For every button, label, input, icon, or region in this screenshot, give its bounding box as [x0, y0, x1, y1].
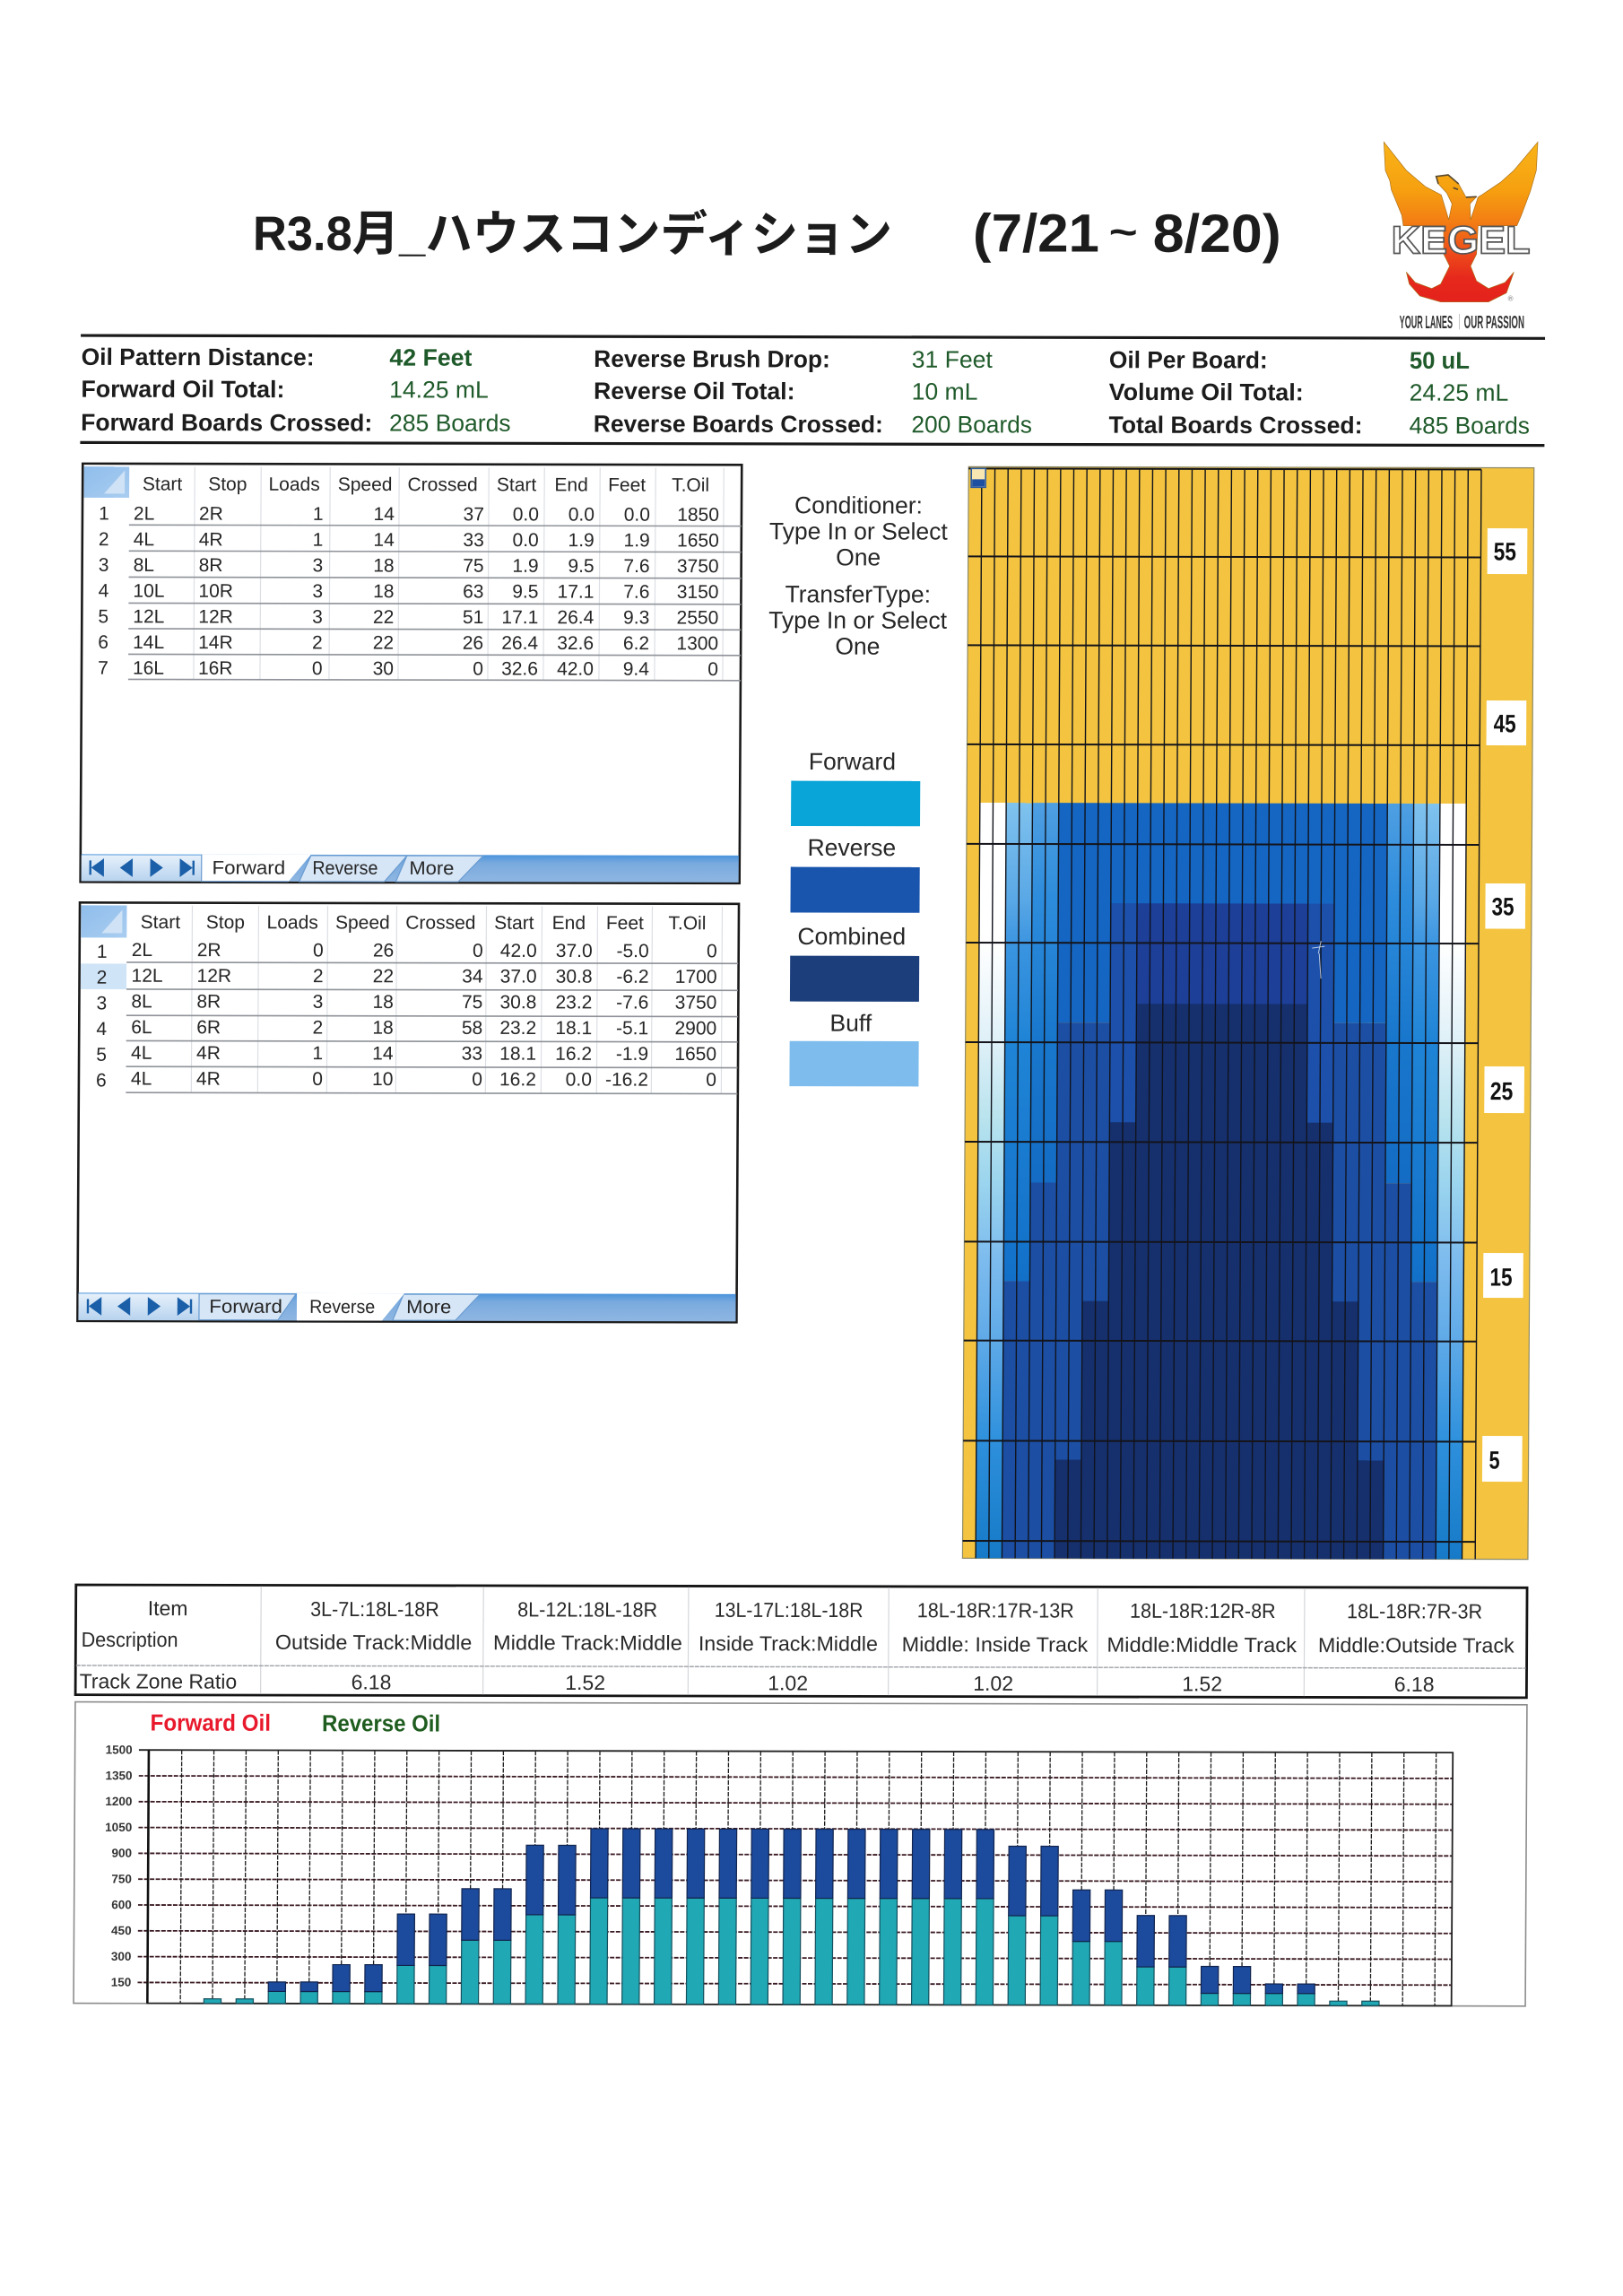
table data rows: 14 — [372, 1043, 394, 1064]
table data rows: 4 — [96, 1019, 107, 1039]
y axis labels: 150 — [111, 1976, 131, 1989]
table data rows: -5.0 — [616, 941, 649, 961]
y axis labels: 1500 — [106, 1743, 133, 1756]
y axis labels: 1200 — [105, 1795, 132, 1808]
table header row: End — [554, 474, 588, 495]
chart legend — [151, 1709, 440, 1736]
summary column: reverse — [594, 345, 1032, 438]
table corner cell — [84, 466, 129, 498]
y axis labels: 600 — [111, 1898, 132, 1911]
distance label 5: 5 — [1488, 1447, 1500, 1474]
table data rows: 3 — [312, 555, 323, 576]
panel: oil per board chart — [74, 1702, 1527, 2006]
ratio row: 6.18 — [1394, 1673, 1435, 1696]
description row: Inside Track:Middle — [699, 1631, 878, 1656]
table data rows: 14 — [374, 504, 395, 525]
table data rows: 2 — [97, 968, 107, 988]
distance grid lines — [963, 468, 1481, 1542]
table data rows: 16R — [198, 658, 233, 679]
distance label 15: 15 — [1489, 1264, 1513, 1292]
distance label 5 — [1482, 1436, 1523, 1482]
legend: combined: Combined — [797, 923, 906, 950]
table data rows — [98, 503, 719, 680]
table header row: Start — [497, 474, 537, 495]
conditioner and transfer type note: One — [836, 544, 881, 570]
table data rows: 33 — [462, 1044, 482, 1065]
summary column: totals — [1108, 346, 1531, 439]
table data rows: 30 — [373, 658, 394, 679]
table data rows: 0.0 — [513, 530, 539, 551]
sheet tab bar: Forward active: Forward — [212, 857, 285, 879]
table data rows: -16.2 — [605, 1070, 648, 1091]
tagline: YOUR LANES — [1400, 313, 1453, 333]
table data rows: 12R — [197, 966, 231, 987]
table header row: T.Oil — [672, 475, 709, 496]
table data rows: 0 — [473, 658, 483, 679]
table data rows: 4L — [134, 529, 154, 550]
table header row: Speed — [338, 474, 393, 495]
summary column: forward: Oil Pattern Distance: — [82, 344, 315, 370]
table data rows: 9.4 — [623, 659, 649, 680]
table data rows: 18.1 — [555, 1018, 592, 1039]
table data rows: 30.8 — [556, 967, 593, 987]
sheet tab bar: Reverse active: More — [406, 1297, 451, 1318]
distance label 45 — [1487, 700, 1526, 745]
table data rows: 18 — [372, 992, 394, 1013]
table data rows: 3 — [96, 993, 107, 1013]
distance label 25: 25 — [1490, 1077, 1513, 1105]
y axis labels: 1350 — [105, 1769, 133, 1782]
summary column: forward: 14.25 mL — [389, 376, 489, 404]
table data rows: 26 — [373, 941, 394, 961]
table data rows: 1 — [313, 530, 323, 551]
stacked bars: reverse oil — [268, 1828, 1315, 1994]
ratio row: 1.52 — [1182, 1672, 1222, 1695]
table data rows: 2 — [312, 632, 323, 653]
table header row: End — [552, 913, 586, 934]
table data rows: 2 — [313, 966, 324, 987]
table data rows: 5 — [96, 1045, 107, 1065]
distance label 35: 35 — [1491, 892, 1515, 920]
table header row — [143, 474, 709, 496]
ratio row: 1.52 — [565, 1671, 605, 1694]
ratio row: 1.02 — [973, 1672, 1013, 1695]
table data rows: 22 — [373, 966, 394, 987]
table header row: Crossed — [405, 913, 476, 934]
table header row: Stop — [206, 912, 245, 933]
track zone ratio table — [75, 1585, 1527, 1698]
table data rows: 30.8 — [499, 992, 536, 1013]
legend: buff — [789, 1010, 919, 1086]
table data rows: 2L — [134, 503, 154, 525]
zone ranges row — [148, 1596, 1482, 1623]
legend: combined — [790, 923, 919, 1002]
table header row — [141, 912, 706, 934]
title: ~ — [1109, 211, 1138, 255]
panel: reverse load table — [77, 902, 739, 1322]
board grid lines — [976, 468, 1481, 1559]
description row: Middle:Outside Track — [1318, 1633, 1515, 1657]
table data rows: 42.0 — [500, 941, 537, 961]
table data rows: 8L — [131, 991, 152, 1012]
summary column: reverse: 10 mL — [912, 378, 978, 405]
table header row: Crossed — [407, 474, 478, 495]
table data rows: 6R — [196, 1017, 221, 1038]
table data rows: 12L — [133, 606, 164, 627]
summary column: forward: Forward Oil Total: — [81, 376, 285, 403]
summary column: totals: Volume Oil Total: — [1109, 378, 1304, 405]
table data rows: 0 — [473, 941, 483, 961]
distance label 25 — [1484, 1066, 1524, 1113]
description row — [82, 1628, 1515, 1657]
table data rows: 18 — [372, 1018, 394, 1039]
title: 8/20) — [1153, 204, 1281, 264]
sheet tab bar: Forward active — [82, 854, 739, 883]
table header row: Speed — [335, 912, 390, 934]
table data rows: 32.6 — [557, 633, 594, 654]
table data rows: 4R — [196, 1043, 221, 1064]
table data rows: 4 — [99, 581, 109, 602]
phoenix — [1384, 142, 1538, 302]
table data rows: 7 — [98, 658, 108, 679]
y axis labels: 900 — [112, 1847, 132, 1860]
description row: Outside Track:Middle — [275, 1631, 472, 1654]
table data rows: 14R — [198, 632, 233, 653]
summary column: forward: 42 Feet — [389, 344, 473, 371]
table data rows: 2 — [312, 1017, 323, 1039]
table header row: Feet — [608, 475, 646, 496]
table data rows: 3750 — [675, 993, 716, 1013]
table data rows: 0.0 — [513, 504, 539, 525]
stacked bars: forward oil — [204, 1897, 1380, 2005]
distance label 35 — [1485, 883, 1525, 929]
table data rows: 26.4 — [501, 633, 539, 654]
registered mark: ® — [1508, 295, 1514, 303]
summary column: forward: 285 Boards — [389, 410, 511, 437]
table header row: Start — [143, 474, 183, 495]
colour legend — [789, 748, 920, 1086]
table data rows: 12R — [198, 606, 233, 628]
icon: Kegel phoenix logo: OUR PASSION — [1464, 313, 1524, 333]
y axis labels — [104, 1743, 133, 1989]
conditioner and transfer type note: Conditioner: — [794, 491, 923, 519]
table data rows: 9.3 — [623, 607, 649, 628]
oil columns — [976, 803, 1466, 1559]
conditioner and transfer type note: TransferType: — [785, 580, 931, 608]
summary column: totals: Total Boards Crossed: — [1108, 412, 1363, 439]
table data rows: 3 — [99, 555, 109, 576]
table data rows: 0 — [707, 941, 717, 961]
table data rows: 1650 — [674, 1044, 716, 1065]
zone ranges row: 18L-18R:17R-13R — [917, 1598, 1074, 1622]
table data rows: 1 — [312, 1043, 323, 1064]
summary column: reverse: 200 Boards — [911, 411, 1032, 438]
table data rows: 0 — [312, 1069, 323, 1090]
table data rows: 4R — [199, 529, 223, 550]
table data rows: 2R — [197, 940, 221, 961]
y axis labels: 300 — [111, 1950, 131, 1963]
table header row: Loads — [267, 912, 318, 933]
table data rows: 6.2 — [623, 633, 649, 654]
table data rows: 17.1 — [501, 607, 538, 628]
table data rows: 22 — [373, 633, 394, 654]
panel: forward load table — [81, 464, 742, 883]
scan scratch — [1312, 941, 1324, 978]
table data rows — [96, 940, 717, 1092]
title: (7/21 — [973, 203, 1099, 264]
description row: Description — [82, 1628, 178, 1651]
y axis labels: 450 — [111, 1924, 132, 1937]
table data rows: 6L — [131, 1017, 152, 1038]
table data rows: 1 — [313, 504, 324, 525]
zone ranges row: Item — [148, 1596, 188, 1620]
table data rows: 0 — [707, 659, 718, 680]
table data rows: 37.0 — [556, 941, 593, 961]
sheet tab bar: Forward active: More — [409, 858, 455, 879]
pattern summary block — [80, 335, 1545, 446]
table corner cell — [81, 905, 127, 937]
table data rows: 18.1 — [499, 1044, 536, 1065]
table data rows: 6 — [98, 632, 108, 653]
table data rows: 2550 — [677, 607, 718, 629]
table data rows: 37.0 — [500, 967, 537, 987]
table data rows: 8L — [134, 555, 154, 576]
summary column: reverse: Reverse Boards Crossed: — [594, 411, 883, 438]
distance label 55 — [1488, 528, 1527, 574]
table data rows: 1.9 — [568, 530, 595, 551]
table data rows: -6.2 — [616, 967, 649, 987]
table data rows: 10R — [198, 581, 233, 602]
table data rows: 23.2 — [499, 1018, 536, 1039]
description row: Middle: Inside Track — [902, 1632, 1089, 1657]
sheet tab bar: Reverse active: Forward — [209, 1297, 282, 1318]
zone ranges row: 3L-7L:18L-18R — [310, 1597, 439, 1621]
table data rows: 8R — [196, 992, 221, 1013]
table data rows: 1 — [97, 942, 108, 962]
table data rows: 14L — [133, 632, 164, 653]
chart legend: Forward Oil — [151, 1709, 271, 1736]
table header row: Loads — [268, 474, 320, 495]
chart legend: Reverse Oil — [322, 1709, 440, 1736]
table data rows: 0.0 — [568, 504, 595, 526]
title: R3.8月_ハウスコンディション — [253, 207, 892, 262]
table data rows: 3 — [313, 992, 323, 1013]
beak and eye detail — [1436, 175, 1477, 197]
table header row: Start — [494, 913, 534, 934]
y axis labels: 1050 — [105, 1821, 132, 1834]
table data rows: 8R — [199, 555, 223, 576]
table data rows: 0.0 — [624, 505, 650, 526]
distance label 55: 55 — [1494, 538, 1516, 566]
table data rows: 42.0 — [557, 659, 594, 680]
conditioner and transfer type note: One — [835, 633, 881, 660]
legend: reverse — [790, 834, 920, 913]
table data rows: 3 — [312, 581, 323, 602]
table data rows: 2900 — [674, 1018, 716, 1039]
table data rows: 0 — [472, 1069, 482, 1090]
table data rows: 1700 — [675, 967, 717, 987]
table data rows: 4L — [131, 1068, 152, 1090]
table data rows: 26.4 — [557, 607, 595, 628]
table header row: Feet — [606, 913, 644, 934]
table data rows: 4R — [196, 1069, 221, 1090]
table data rows: 3750 — [677, 556, 719, 577]
table data rows: 1850 — [677, 505, 719, 526]
table data rows: 1 — [99, 503, 109, 524]
table data rows: 33 — [463, 530, 484, 551]
table data rows: -7.6 — [616, 992, 648, 1013]
table data rows: 7.6 — [623, 582, 650, 603]
ratio row — [80, 1669, 1435, 1696]
table data rows: 0 — [313, 940, 324, 961]
table data rows: 0 — [312, 658, 323, 679]
legend: reverse: Reverse — [807, 834, 896, 861]
summary column: totals: Oil Per Board: — [1109, 346, 1268, 374]
summary column: reverse: 31 Feet — [912, 346, 994, 373]
sheet tab bar: Reverse active — [78, 1292, 736, 1321]
summary column: forward: Forward Boards Crossed: — [81, 409, 372, 437]
table data rows: 1.9 — [624, 530, 650, 551]
title — [253, 202, 1281, 264]
table data rows: 22 — [373, 607, 394, 628]
panel: lane oil pattern heat map — [962, 466, 1534, 1560]
table data rows: 18 — [373, 555, 395, 576]
table data rows: 10 — [372, 1069, 393, 1090]
table data rows: 0.0 — [566, 1069, 592, 1091]
legend: forward — [791, 748, 920, 826]
ratio row: 6.18 — [352, 1670, 392, 1694]
legend: forward: Forward — [809, 748, 896, 775]
table data rows: 58 — [462, 1018, 482, 1039]
icon: Kegel phoenix logo — [1384, 142, 1538, 333]
table data rows: 0 — [706, 1070, 716, 1091]
table data rows: 6 — [96, 1070, 107, 1091]
table data rows: 18 — [373, 581, 395, 602]
description row: Middle Track:Middle — [493, 1631, 682, 1655]
table data rows: 16.2 — [499, 1069, 536, 1090]
sheet tab bar: Reverse active: Reverse — [309, 1297, 375, 1318]
summary column: forward — [81, 344, 511, 437]
sheet tab bar: Forward active: Reverse — [312, 858, 378, 879]
table data rows: 16L — [133, 658, 164, 679]
table data rows: -1.9 — [616, 1044, 648, 1065]
table data rows: 9.5 — [512, 581, 539, 602]
table data rows: 23.2 — [555, 992, 592, 1013]
selected row header — [81, 963, 126, 989]
table data rows: 2L — [132, 940, 152, 961]
description row: Middle:Middle Track — [1107, 1633, 1298, 1657]
table data rows: 32.6 — [501, 659, 538, 680]
table header row: T.Oil — [668, 913, 706, 934]
summary column: reverse: Reverse Brush Drop: — [594, 345, 830, 373]
zone ranges row: 8L-12L:18L-18R — [517, 1597, 657, 1622]
table data rows: 9.5 — [568, 556, 595, 577]
conditioner and transfer type note — [768, 491, 949, 660]
table data rows: 34 — [462, 966, 483, 987]
table data rows: 75 — [462, 992, 482, 1013]
zone ranges row: 13L-17L:18L-18R — [715, 1598, 864, 1622]
table data rows: 16.2 — [555, 1044, 592, 1065]
summary column: totals: 24.25 mL — [1410, 379, 1508, 406]
summary column: reverse: Reverse Oil Total: — [594, 378, 795, 404]
legend: buff: Buff — [829, 1010, 872, 1037]
table header row: Stop — [208, 474, 247, 495]
table data rows: 14 — [373, 530, 395, 551]
table data rows: 3 — [312, 607, 323, 628]
table data rows: 63 — [463, 581, 484, 602]
distance label 15 — [1483, 1253, 1523, 1298]
ratio row: Track Zone Ratio — [80, 1669, 237, 1693]
y axis labels: 750 — [111, 1872, 132, 1885]
table data rows: 7.6 — [623, 556, 650, 577]
conditioner and transfer type note: Type In or Select — [769, 517, 948, 545]
KEGEL wordmark: KEGEL — [1392, 220, 1531, 263]
table data rows: 51 — [463, 607, 483, 628]
table data rows: 75 — [463, 556, 484, 577]
table data rows: 1300 — [676, 633, 718, 654]
ratio row: 1.02 — [768, 1671, 808, 1694]
zone ranges row: 18L-18R:7R-3R — [1347, 1599, 1482, 1623]
selection marker — [971, 468, 985, 487]
table data rows: -5.1 — [616, 1018, 648, 1039]
summary column: totals: 485 Boards — [1409, 412, 1530, 439]
summary column: totals: 50 uL — [1410, 347, 1470, 374]
table data rows: 10L — [133, 581, 165, 602]
table data rows: 2 — [99, 529, 109, 550]
table data rows: 3150 — [677, 582, 719, 603]
conditioner and transfer type note: Type In or Select — [768, 606, 948, 634]
table data rows: 17.1 — [558, 582, 595, 603]
table data rows: 37 — [464, 504, 484, 525]
table data rows: 5 — [98, 606, 108, 627]
table data rows: 26 — [463, 633, 483, 654]
table data rows: 1.9 — [512, 556, 539, 577]
distance label 45: 45 — [1494, 709, 1516, 737]
table data rows: 4L — [131, 1043, 152, 1064]
table data rows: 1650 — [677, 530, 719, 551]
zone ranges row: 18L-18R:12R-8R — [1130, 1599, 1276, 1622]
table data rows: 12L — [132, 966, 163, 987]
table header row: Start — [141, 912, 180, 933]
table data rows: 2R — [199, 504, 223, 525]
